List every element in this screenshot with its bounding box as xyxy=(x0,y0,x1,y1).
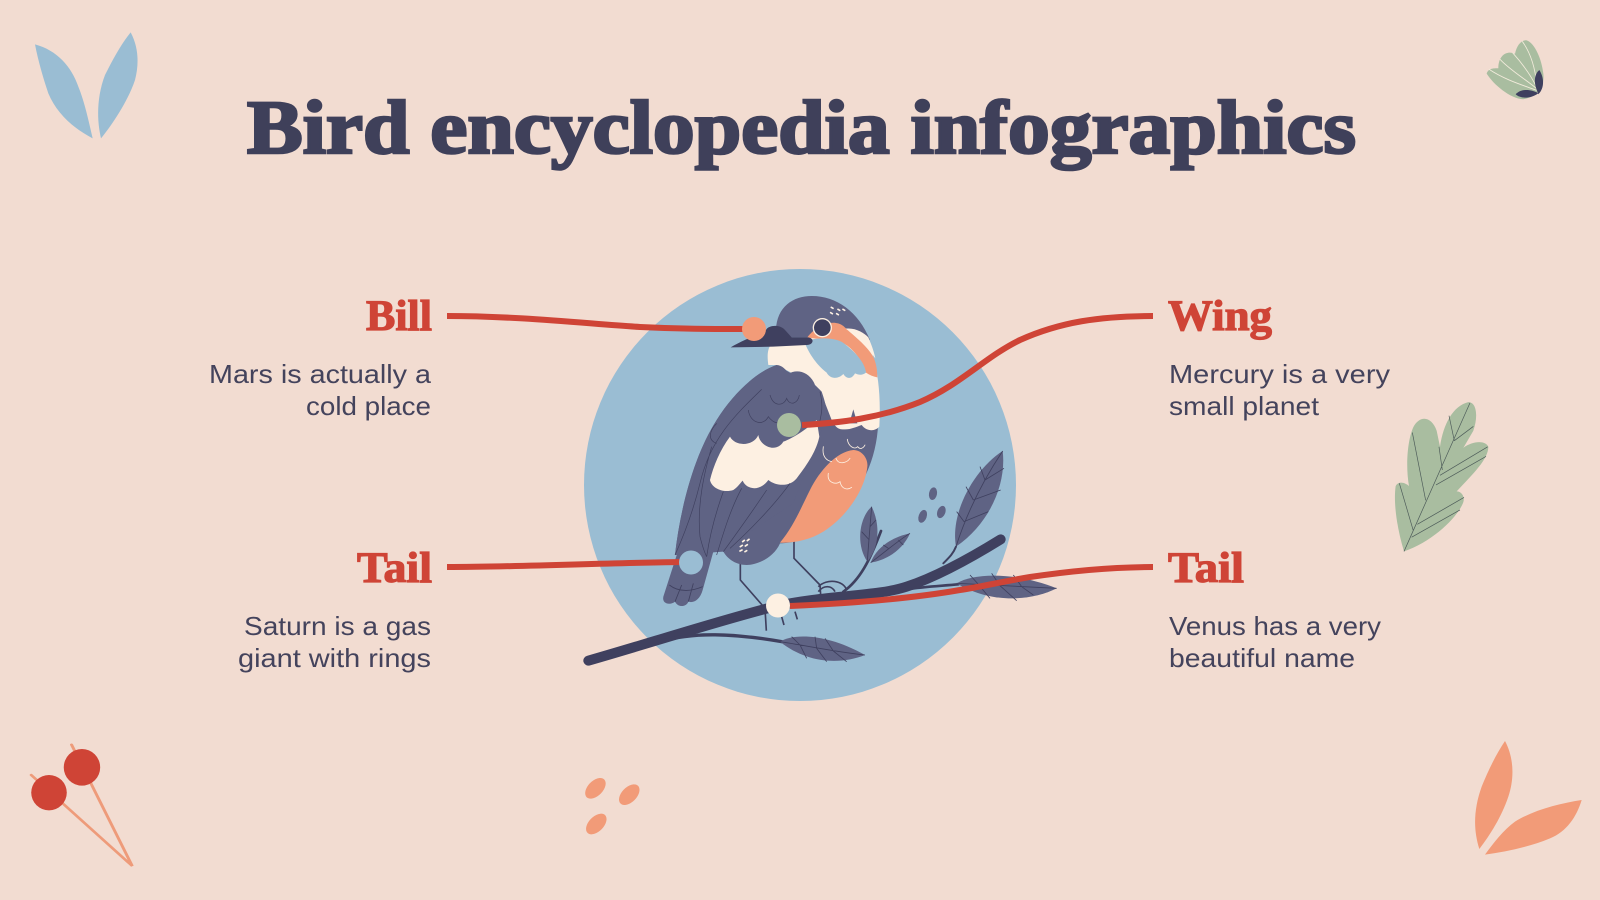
leaf veins xyxy=(780,451,1057,662)
text: tail right description: beautiful name xyxy=(1169,643,1355,673)
face cream patch xyxy=(846,328,875,358)
connector: tail left xyxy=(447,562,680,567)
label block: bill xyxy=(209,293,432,421)
text: bill description xyxy=(209,359,432,421)
body xyxy=(675,365,878,565)
decoration: orange seeds bottom centre xyxy=(581,775,644,837)
text: wing description: small planet xyxy=(1169,391,1320,421)
marker: wing xyxy=(777,413,801,437)
label block: tail right xyxy=(1168,545,1381,673)
chest xyxy=(768,327,880,430)
throat xyxy=(805,338,866,378)
marker: tail right xyxy=(766,594,790,618)
text: wing description: Mercury is a very xyxy=(1169,359,1390,389)
text: tail left description: giant with rings xyxy=(238,643,431,673)
text: bill description: cold place xyxy=(306,391,431,421)
tail xyxy=(663,550,713,606)
heading: wing: Wing xyxy=(1168,293,1273,340)
heading: tail right: Tail xyxy=(1168,545,1244,592)
heading: tail left: Tail xyxy=(357,545,432,592)
bird illustration on branch xyxy=(588,296,1057,662)
text: tail right description: Venus has a very xyxy=(1169,611,1381,641)
connector: bill xyxy=(447,316,745,329)
eye xyxy=(813,318,832,337)
decoration: orange leaves bottom right xyxy=(1475,741,1582,855)
heading: bill: Bill xyxy=(366,293,432,340)
decoration: green oak leaf right xyxy=(1395,402,1488,551)
chest notch xyxy=(849,409,857,423)
text: tail left description xyxy=(238,611,431,673)
face stripe xyxy=(807,323,877,377)
feather lines xyxy=(675,389,822,557)
decoration: blue leaves top left xyxy=(35,32,138,138)
text: wing description xyxy=(1169,359,1390,421)
branch leaves xyxy=(780,451,1057,661)
label block: tail left xyxy=(238,545,432,673)
cream feather marks xyxy=(823,439,865,489)
marker: tail left xyxy=(679,550,703,574)
text: tail right description xyxy=(1169,611,1381,673)
branch xyxy=(588,531,1001,661)
wing cream patch xyxy=(710,420,819,491)
decoration: green flower top right xyxy=(1487,40,1544,99)
text: tail left description: Saturn is a gas xyxy=(244,611,431,641)
belly xyxy=(780,450,867,543)
beak xyxy=(731,326,813,347)
text: bill description: Mars is actually a xyxy=(209,359,432,389)
connector: wing xyxy=(802,316,1153,425)
label block: wing xyxy=(1168,293,1390,421)
marker: bill xyxy=(742,317,766,341)
connector: tail right xyxy=(790,567,1153,606)
decoration: red berries bottom left xyxy=(31,745,132,866)
title: Bird encyclopedia infographics xyxy=(247,86,1356,170)
head xyxy=(776,296,870,340)
legs xyxy=(740,540,847,631)
head and rump dots xyxy=(740,307,845,552)
wing xyxy=(675,365,826,555)
blue circle backdrop xyxy=(584,269,1016,701)
